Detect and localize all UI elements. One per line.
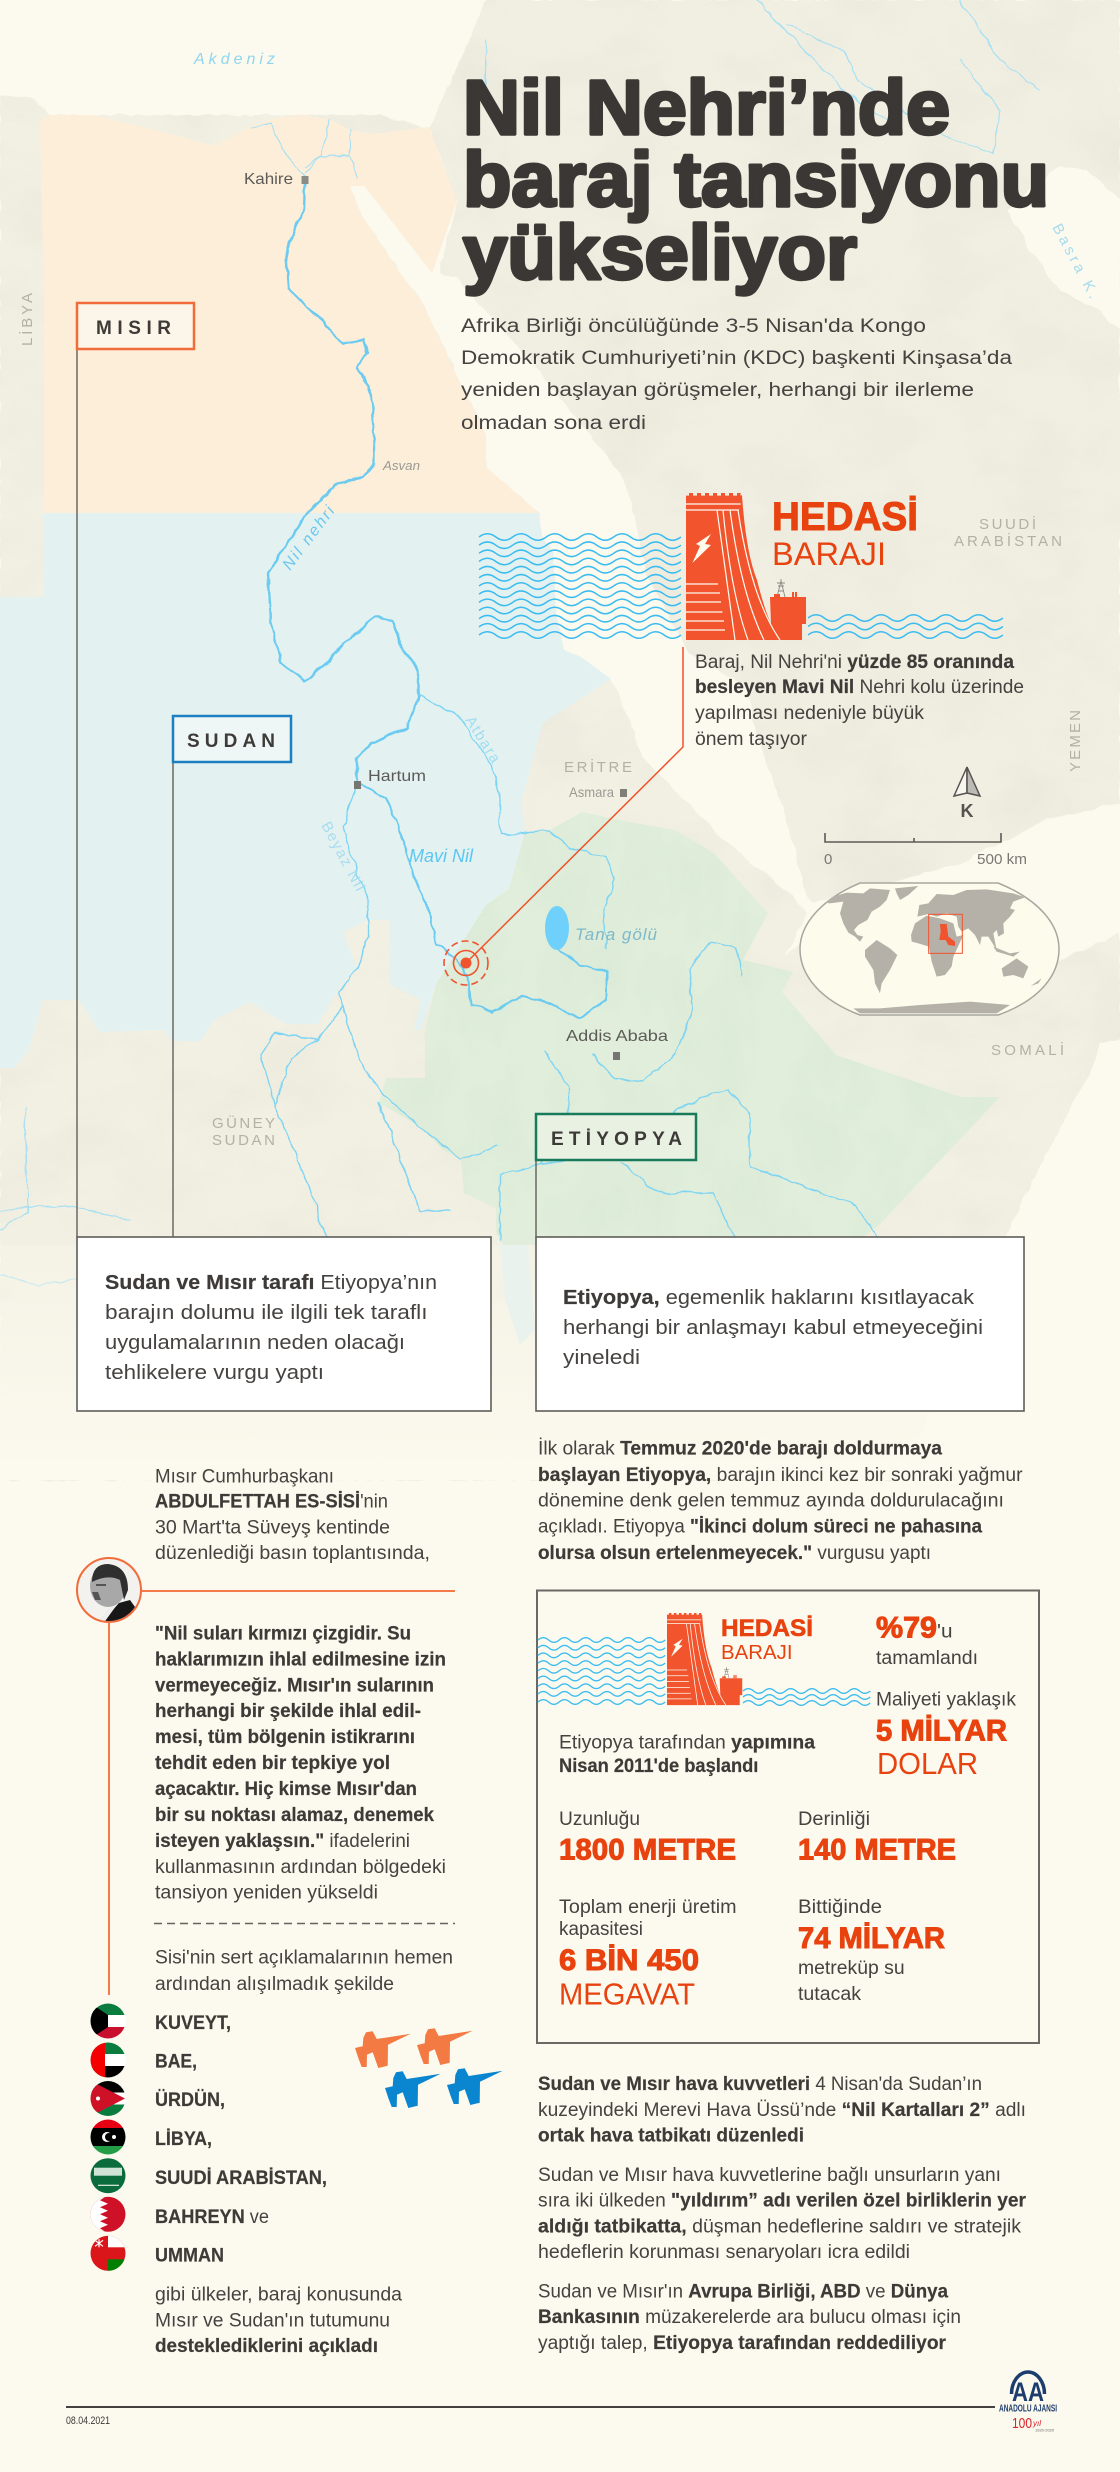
text: air force exercise: Sudan ve Mısır hava kuvvetlerine bağlı unsurların yanı: [538, 2165, 1001, 2186]
text: air force exercise: Bankasının müzakerelerde ara bulucu olması için: [538, 2307, 961, 2328]
intro text: [461, 316, 1013, 434]
map labels: Asmara: [569, 784, 614, 800]
quote text: tehdit eden bir tepkiye yol: [155, 1753, 390, 1774]
icon: fighter jets: [355, 2028, 503, 2108]
text: statement lead-in: Sisi'nin sert açıklamalarının hemen: [155, 1948, 453, 1968]
stat: cost: 5 MİLYAR: [876, 1714, 1007, 1747]
orange timeline connector: [109, 1591, 455, 1995]
stat: length: 1800 METRE: [559, 1834, 736, 1867]
panel: dam facts: [537, 1590, 1039, 2043]
dam description with leader line: önem taşıyor: [695, 729, 808, 750]
dam description with leader line: Baraj, Nil Nehri'ni yüzde 85 oranında: [695, 652, 1014, 673]
label: SUDAN: [173, 716, 291, 762]
flag: Jordan: [90, 2080, 126, 2116]
title: Nil Nehri’nde: [463, 65, 950, 151]
quote text: herhangi bir şekilde ihlal edil-: [155, 1701, 421, 1722]
stat: length: [559, 1809, 736, 1867]
stat: completion: tamamlandı: [876, 1648, 978, 1669]
stat: depth: [798, 1809, 956, 1867]
text: filling the dam: olursa olsun ertelenmeyecek." vurgusu yaptı: [538, 1543, 931, 1564]
icon: portrait of Sisi: [77, 1558, 141, 1628]
text: supporting countries: KUVEYT,: [155, 2013, 231, 2034]
text: air force exercise: [538, 2074, 1027, 2354]
scale bar: [824, 833, 1027, 868]
quote text: mesi, tüm bölgenin istikrarını: [155, 1727, 415, 1748]
panel: Ethiopia area: [379, 812, 1000, 1245]
dam description with leader line: [466, 647, 1024, 963]
map fade: [0, 1245, 1120, 1480]
text: support conclusion: [155, 2285, 402, 2357]
map labels: SOMALİ: [991, 1041, 1064, 1059]
intro text: yeniden başlayan görüşmeler, herhangi bir ilerleme: [461, 380, 974, 401]
text: Sisi intro: Mısır Cumhurbaşkanı: [155, 1466, 334, 1488]
map labels: Nil nehri: [280, 503, 339, 573]
small dam name: HEDASİ: [721, 1615, 813, 1642]
stat: capacity: kapasitesi: [559, 1919, 643, 1940]
text: supporting countries: LİBYA,: [155, 2129, 212, 2150]
text: statement lead-in: ardından alışılmadık şekilde: [155, 1974, 394, 1995]
text: Sisi intro: [155, 1466, 430, 1564]
dam description with leader line: besleyen Mavi Nil Nehri kolu üzerinde: [695, 677, 1024, 698]
stat: reservoir volume: tutacak: [798, 1984, 862, 2005]
map labels: Basra K.: [1048, 221, 1102, 301]
text: supporting countries: SUUDİ ARABİSTAN,: [155, 2168, 327, 2189]
text: support conclusion: gibi ülkeler, baraj konusunda: [155, 2285, 402, 2306]
text: construction start: Etiyopya tarafından yapımına: [559, 1733, 815, 1754]
stat: completion: %79: [876, 1612, 937, 1644]
rivers: Nile system: [0, 0, 1040, 1285]
flag: Kuwait: [90, 2003, 126, 2039]
text: supporting countries: [155, 2013, 327, 2267]
label: MISIR: MISIR: [96, 318, 171, 339]
stat: reservoir volume: [798, 1897, 945, 2005]
map labels: Hartum: [368, 768, 426, 785]
map labels: Addis Ababa: [566, 1028, 668, 1045]
flag: Bahrain: [90, 2196, 126, 2232]
small dam name: BARAJI: [721, 1642, 792, 1664]
dam illustration: large: [479, 493, 1003, 640]
callout: Sudan and Egypt side: barajın dolumu ile ilgili tek taraflı: [105, 1302, 428, 1324]
text: filling the dam: başlayan Etiyopya, barajın ikinci kez bir sonraki yağmur: [538, 1465, 1023, 1486]
flag: Saudi Arabia: [90, 2158, 126, 2194]
map labels: ARABİSTAN: [954, 532, 1062, 550]
text: air force exercise: ortak hava tatbikatı düzenledi: [538, 2126, 804, 2147]
title: [463, 65, 1049, 296]
intro text: Afrika Birliği öncülüğünde 3-5 Nisan'da Kongo: [461, 316, 926, 337]
callout: Ethiopia: [536, 1237, 1024, 1411]
map labels: Kahire: [244, 171, 293, 188]
logo: Anadolu Ajansı: [999, 2372, 1057, 2432]
text: air force exercise: Sudan ve Mısır hava kuvvetleri 4 Nisan'da Sudan’ın: [538, 2074, 982, 2095]
text: support conclusion: Mısır ve Sudan'ın tutumunu: [155, 2311, 390, 2332]
stat: reservoir volume: 74 MİLYAR: [798, 1922, 945, 1955]
map labels: ERİTRE: [564, 758, 632, 776]
map labels: Atbara: [462, 713, 504, 767]
text: filling the dam: dönemine denk gelen temmuz ayında doldurulacağını: [538, 1490, 1004, 1512]
stat: capacity: Toplam enerji üretim: [559, 1897, 737, 1918]
text: filling the dam: açıkladı. Etiyopya "İkinci dolum süreci ne pahasına: [538, 1517, 982, 1538]
quote text: açacaktır. Hiç kimse Mısır'dan: [155, 1779, 417, 1800]
north arrow: [954, 767, 980, 821]
title: baraj tansiyonu: [463, 137, 1049, 223]
map labels: GÜNEY: [212, 1114, 275, 1132]
label: ETİYOPYA: [536, 1114, 696, 1160]
stat: completion: [876, 1612, 978, 1669]
panel: Egypt area: [40, 115, 539, 513]
title: yükseliyor: [463, 210, 857, 296]
stat: reservoir volume: Bittiğinde: [798, 1897, 882, 1918]
text: supporting countries: BAE,: [155, 2052, 197, 2073]
map labels: LİBYA: [18, 293, 36, 346]
stat: capacity: [559, 1897, 737, 2012]
stat: length: Uzunluğu: [559, 1809, 640, 1830]
logo: Anadolu Ajansı: 100: [1012, 2415, 1032, 2432]
logo: Anadolu Ajansı: yıl: [1032, 2419, 1041, 2428]
text: air force exercise: sıra iki ülkeden "yıldırım” adı verilen özel birliklerin yer: [538, 2191, 1027, 2212]
stat: depth: Derinliği: [798, 1809, 870, 1830]
logo: Anadolu Ajansı: 1920-2020: [1035, 2428, 1055, 2432]
text: construction start: Nisan 2011'de başlandı: [559, 1756, 758, 1777]
stat: depth: 140 METRE: [798, 1834, 956, 1867]
callout: Sudan and Egypt side: uygulamalarının neden olacağı: [105, 1332, 405, 1354]
text: air force exercise: yaptığı talep, Etiyopya tarafından reddediliyor: [538, 2333, 947, 2354]
text: filling the dam: İlk olarak Temmuz 2020'de barajı doldurmaya: [538, 1439, 942, 1460]
callout: Ethiopia: yineledi: [563, 1347, 640, 1369]
lake: Tana: [545, 906, 569, 950]
quote text: vermeyeceğiz. Mısır'ın sularının: [155, 1676, 434, 1696]
intro text: olmadan sona erdi: [461, 413, 646, 434]
date: 08.04.2021: [66, 2415, 110, 2427]
stat: reservoir volume: metreküp su: [798, 1958, 905, 1979]
flag: Libya: [90, 2119, 126, 2155]
small dam name: [721, 1615, 813, 1664]
leader lines from country labels: [77, 349, 536, 1237]
text: air force exercise: hedeflerin korunması senaryoları icra edildi: [538, 2242, 910, 2263]
map labels: YEMEN: [1067, 710, 1084, 772]
map labels: SUUDİ: [979, 515, 1036, 533]
flag: UAE: [90, 2042, 126, 2078]
dam name: BARAJI: [772, 536, 886, 572]
callout: Ethiopia: Etiyopya, egemenlik haklarını kısıtlayacak: [563, 1287, 975, 1309]
map labels: Tana gölü: [575, 925, 658, 944]
scale bar: 0: [824, 851, 832, 868]
text: Sisi intro: 30 Mart'ta Süveyş kentinde: [155, 1518, 390, 1538]
text: air force exercise: aldığı tatbikatta, düşman hedeflerine saldırı ve stratejik: [538, 2217, 1022, 2238]
map labels: Beyaz Nil: [317, 819, 368, 894]
text: supporting countries: UMMAN: [155, 2246, 224, 2267]
scale bar: 500 km: [977, 851, 1027, 868]
text: supporting countries: ÜRDÜN,: [155, 2090, 225, 2111]
north arrow: K: [960, 801, 974, 821]
dam description with leader line: yapılması nedeniyle büyük: [695, 703, 924, 724]
quote text: haklarımızın ihlal edilmesine izin: [155, 1650, 446, 1671]
map labels: [18, 51, 1102, 1149]
world locator map: [800, 883, 1059, 1015]
logo: Anadolu Ajansı: AA: [1012, 2377, 1044, 2407]
stat: cost: DOLAR: [877, 1746, 978, 1781]
map labels: Akdeniz: [193, 51, 275, 68]
flag: Oman: [90, 2235, 126, 2271]
text: statement lead-in: [155, 1948, 453, 1995]
text: air force exercise: Sudan ve Mısır'ın Avrupa Birliği, ABD ve Dünya: [538, 2282, 948, 2303]
quote text: "Nil suları kırmızı çizgidir. Su: [155, 1624, 411, 1644]
panel: Sudan area: [0, 513, 611, 1068]
quote text: tansiyon yeniden yükseldi: [155, 1882, 378, 1904]
text: air force exercise: kuzeyindeki Merevi Hava Üssü’nde “Nil Kartalları 2” adlı: [538, 2100, 1026, 2121]
label: MISIR: [77, 303, 194, 349]
quote text: bir su noktası alamaz, denemek: [155, 1805, 434, 1826]
stat: completion: 'u: [937, 1622, 952, 1642]
dam location marker: [444, 941, 488, 985]
dam name: HEDASİ: [772, 495, 918, 539]
quote text: [155, 1624, 446, 1904]
stat: cost: [876, 1690, 1016, 1781]
quote text: isteyen yaklaşsın." ifadelerini: [155, 1831, 410, 1852]
label: ETİYOPYA: ETİYOPYA: [551, 1129, 682, 1150]
stat: capacity: 6 BİN 450: [559, 1944, 699, 1977]
text: construction start: [559, 1733, 815, 1777]
map: base and country fills: [0, 0, 1120, 1480]
quote text: kullanmasının ardından bölgedeki: [155, 1857, 446, 1878]
callout: Ethiopia: herhangi bir anlaşmayı kabul etmeyeceğini: [563, 1317, 983, 1339]
map labels: Asvan: [382, 458, 420, 473]
stat: capacity: MEGAVAT: [559, 1976, 695, 2012]
text: Sisi intro: düzenlediği basın toplantısında,: [155, 1543, 430, 1564]
text: Sisi intro: ABDULFETTAH ES-SİSİ'nin: [155, 1492, 388, 1512]
map labels: Mavi Nil: [409, 846, 474, 866]
label: SUDAN: SUDAN: [187, 731, 275, 752]
icon: small dam: [538, 1613, 870, 1705]
logo: Anadolu Ajansı: ANADOLU AJANSI: [999, 2404, 1057, 2414]
text: supporting countries: BAHREYN ve: [155, 2207, 269, 2228]
intro text: Demokratik Cumhuriyeti’nin (KDC) başkenti Kinşasa’da: [461, 348, 1013, 369]
map labels: SUDAN: [212, 1132, 275, 1149]
stat: cost: Maliyeti yaklaşık: [876, 1690, 1016, 1711]
text: support conclusion: desteklediklerini açıkladı: [155, 2336, 378, 2357]
dam name: [772, 495, 918, 572]
callout: Sudan and Egypt side: [77, 1237, 491, 1411]
callout: Sudan and Egypt side: Sudan ve Mısır tarafı Etiyopya’nın: [105, 1272, 437, 1294]
text: filling the dam: [538, 1439, 1023, 1564]
callout: Sudan and Egypt side: tehlikelere vurgu yaptı: [105, 1362, 324, 1384]
